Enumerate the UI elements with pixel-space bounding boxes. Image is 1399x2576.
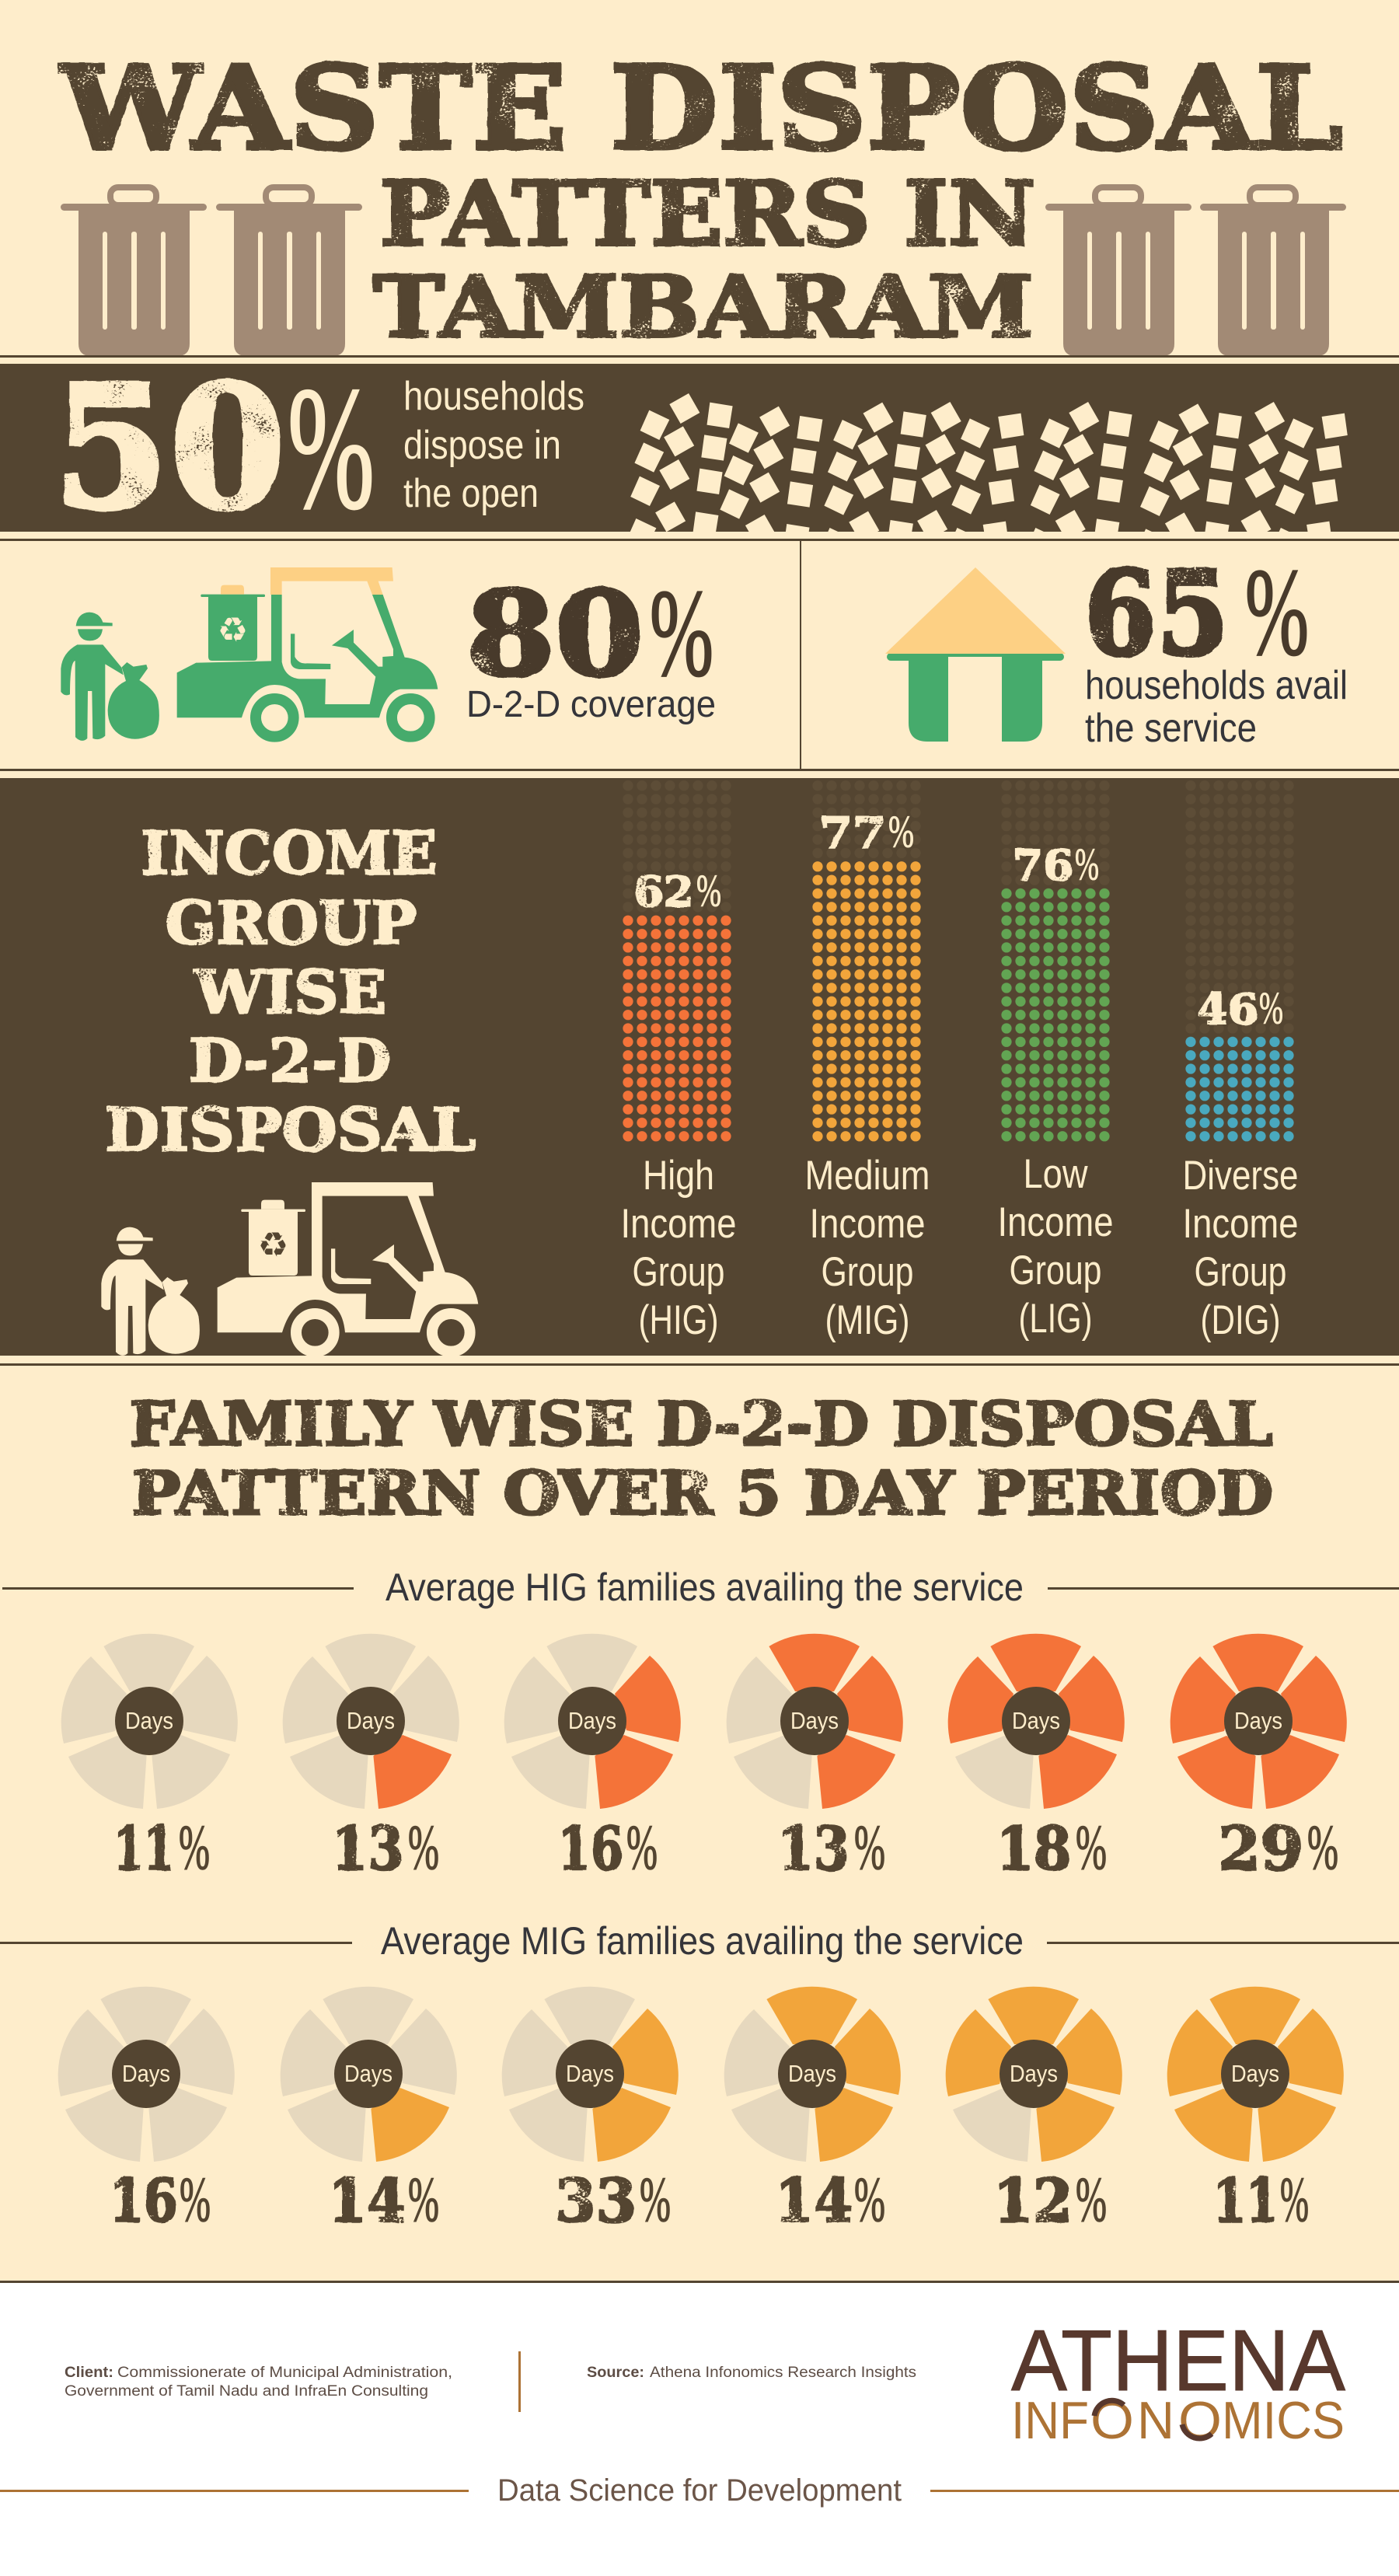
chart: HIG dot column: Group	[633, 1249, 724, 1295]
pie: MIG day 4, 14%	[724, 1987, 901, 2236]
stat: 50 percent: %	[288, 351, 375, 545]
footer: client credit: Government of Tamil Nadu and InfraEn Consulting	[65, 2383, 428, 2400]
icon: green man and collection cart	[61, 567, 438, 741]
chart: MIG dot column: Income	[810, 1201, 925, 1247]
chart: HIG dot column: High	[643, 1153, 714, 1199]
pie: HIG day 2, 13%: 13	[332, 1814, 403, 1884]
chart: HIG dot column: (HIG)	[639, 1297, 718, 1343]
chart: LIG dot column: Group	[1009, 1248, 1102, 1293]
stat: 80 percent D-2-D coverage: %	[650, 564, 713, 702]
footer: tagline: Data Science for Development	[497, 2473, 902, 2508]
logo: Athena Infonomics	[1011, 2312, 1345, 2450]
pie: MIG day 1, 16%: %	[180, 2164, 211, 2235]
subheading: HIG families: Average HIG families availing the service	[386, 1565, 1024, 1609]
chart: LIG dot column: Low	[1023, 1151, 1088, 1197]
chart: LIG dot column: %	[1075, 839, 1099, 889]
footer: client credit	[65, 2365, 452, 2400]
chart: HIG dot column: 62	[633, 867, 694, 916]
chart: MIG dot column: Medium	[805, 1153, 930, 1199]
pie: MIG day 6, 11%: %	[1280, 2164, 1309, 2235]
stat: 65 percent households avail the service: %	[1245, 543, 1309, 681]
pie: HIG day 5, 18%: %	[1076, 1812, 1107, 1883]
chart: MIG dot column: (MIG)	[825, 1297, 909, 1343]
pie: HIG day 5, 18%: 18	[996, 1814, 1071, 1884]
heading: income group wise D-2-D disposal: GROUP	[165, 888, 417, 958]
chart: DIG dot column: Diverse	[1183, 1153, 1298, 1199]
stat: 80 percent D-2-D coverage	[466, 564, 716, 725]
pie: HIG day 3, 16%	[504, 1634, 681, 1884]
stat: 65 percent households avail the service: the service	[1085, 706, 1257, 751]
pie: MIG day 2, 14%: 14	[328, 2166, 406, 2236]
pie: HIG day 1, 11%: %	[179, 1812, 210, 1883]
heading: income group wise D-2-D disposal: DISPOSAL	[105, 1095, 476, 1164]
pie: MIG day 4, 14%: %	[854, 2164, 885, 2235]
footer: source credit: Athena Infonomics Research Insights	[650, 2365, 916, 2381]
chart: DIG dot column: Income	[1183, 1201, 1298, 1247]
pie: MIG day 5, 12%: 12	[993, 2166, 1073, 2236]
pie: HIG day 4, 13%: %	[854, 1812, 885, 1883]
footer: client credit: Client:	[65, 2365, 113, 2381]
chart: DIG dot column: %	[1259, 983, 1283, 1033]
logo: Athena Infonomics: N	[1137, 2391, 1174, 2450]
pie: MIG day 3, 33%	[502, 1987, 679, 2236]
pie: HIG day 3, 16%: 16	[558, 1814, 623, 1884]
pie: MIG day 5, 12%	[946, 1987, 1122, 2236]
stat: 65 percent households avail the service	[1084, 543, 1348, 751]
pie: HIG day 1, 11%	[61, 1634, 238, 1884]
heading: income group wise D-2-D disposal	[105, 819, 476, 1164]
text: households dispose in the open: households	[403, 374, 584, 419]
chart: HIG dot column	[620, 779, 737, 1343]
icon: cream man and collection cart: ♻	[258, 1225, 288, 1265]
chart: LIG dot column: 76	[1013, 840, 1073, 890]
pie: HIG day 1, 11%: 11	[113, 1814, 174, 1884]
stat: 80 percent D-2-D coverage: D-2-D coverage	[466, 684, 716, 725]
chart: MIG dot column: Group	[821, 1249, 914, 1295]
title	[59, 40, 1343, 357]
chart: DIG dot column: 46	[1198, 984, 1258, 1034]
pie: HIG day 4, 13%: 13	[778, 1814, 850, 1884]
chart: HIG dot column: Income	[620, 1201, 737, 1247]
pie: MIG day 6, 11%: 11	[1213, 2166, 1279, 2236]
heading: family wise disposal pattern: PATTERN OVER 5 DAY PERIOD	[131, 1458, 1273, 1529]
pie: HIG day 5, 18%	[948, 1634, 1125, 1884]
logo: Athena Infonomics: MICS	[1222, 2391, 1345, 2450]
heading: income group wise D-2-D disposal: D-2-D	[189, 1026, 391, 1095]
heading: family wise disposal pattern	[129, 1389, 1273, 1529]
chart: DIG dot column	[1183, 779, 1298, 1343]
chart: LIG dot column: (LIG)	[1018, 1296, 1093, 1342]
pie: HIG day 4, 13%	[727, 1634, 903, 1884]
pie: HIG day 2, 13%	[283, 1634, 459, 1884]
panel: income group wise disposal	[0, 778, 1399, 1356]
chart: MIG dot column	[805, 779, 930, 1343]
subheading: HIG families	[2, 1565, 1399, 1609]
logo: Athena Infonomics: ATHENA	[1011, 2312, 1345, 2409]
stat: 50 percent: 50	[53, 348, 286, 547]
text: households dispose in the open: the open	[403, 471, 539, 516]
pie: HIG day 2, 13%: %	[408, 1812, 439, 1883]
pie: MIG day 1, 16%	[58, 1987, 235, 2236]
pie: HIG day 3, 16%: %	[626, 1812, 658, 1883]
pie: MIG day 2, 14%: %	[408, 2164, 439, 2235]
icon: trash cans	[61, 187, 1346, 356]
heading: income group wise D-2-D disposal: INCOME	[141, 819, 438, 888]
stat: 65 percent households avail the service: households avail	[1085, 663, 1348, 708]
chart: DIG dot column: (DIG)	[1200, 1297, 1281, 1343]
text: households dispose in the open: dispose in	[403, 423, 561, 468]
chart: LIG dot column	[998, 779, 1113, 1342]
subheading: MIG families: Average MIG families availing the service	[381, 1919, 1024, 1963]
pie: MIG day 6, 11%	[1167, 1987, 1344, 2236]
panel: open disposal band	[0, 364, 1399, 532]
title: PATTERS IN	[379, 162, 1035, 266]
pie: MIG day 5, 12%: %	[1076, 2164, 1107, 2235]
subheading: MIG families	[0, 1919, 1399, 1963]
stat: 65 percent households avail the service: 65	[1084, 546, 1229, 682]
icon: cream man and collection cart	[101, 1182, 478, 1356]
chart: MIG dot column: %	[888, 806, 914, 857]
footer: tagline	[0, 2473, 1399, 2508]
icon: scattered waste papers	[630, 393, 1348, 532]
heading: family wise disposal pattern: FAMILY WISE D-2-D DISPOSAL	[129, 1389, 1273, 1460]
stat: 80 percent D-2-D coverage: 80	[466, 566, 644, 703]
footer: source credit: Source:	[587, 2365, 644, 2381]
pie: MIG day 2, 14%	[281, 1987, 457, 2236]
footer: client credit: Commissionerate of Municipal Administration,	[117, 2365, 452, 2381]
logo: Athena Infonomics: O	[1090, 2391, 1134, 2450]
pie: MIG day 3, 33%: %	[640, 2164, 671, 2235]
logo: Athena Infonomics: O	[1178, 2391, 1222, 2450]
logo: Athena Infonomics: INF	[1011, 2391, 1089, 2450]
pie: MIG day 4, 14%: 14	[775, 2166, 853, 2236]
chart: MIG dot column: 77	[819, 808, 886, 857]
pie: HIG day 6, 29%: %	[1307, 1812, 1338, 1883]
heading: income group wise D-2-D disposal: WISE	[194, 958, 386, 1027]
chart: HIG dot column: %	[696, 865, 721, 916]
pie: MIG day 3, 33%: 33	[555, 2166, 637, 2236]
text: households dispose in the open	[403, 374, 584, 516]
title: WASTE DISPOSAL	[59, 40, 1343, 176]
chart: DIG dot column: Group	[1194, 1249, 1287, 1295]
chart: LIG dot column: Income	[998, 1199, 1113, 1245]
pie: HIG day 6, 29%	[1170, 1634, 1347, 1884]
pie: HIG day 6, 29%: 29	[1218, 1814, 1303, 1884]
pie: MIG day 1, 16%: 16	[110, 2166, 178, 2236]
icon: green man and collection cart: ♻	[218, 610, 248, 650]
icon: house	[885, 567, 1066, 742]
title: TAMBARAM	[373, 257, 1034, 357]
